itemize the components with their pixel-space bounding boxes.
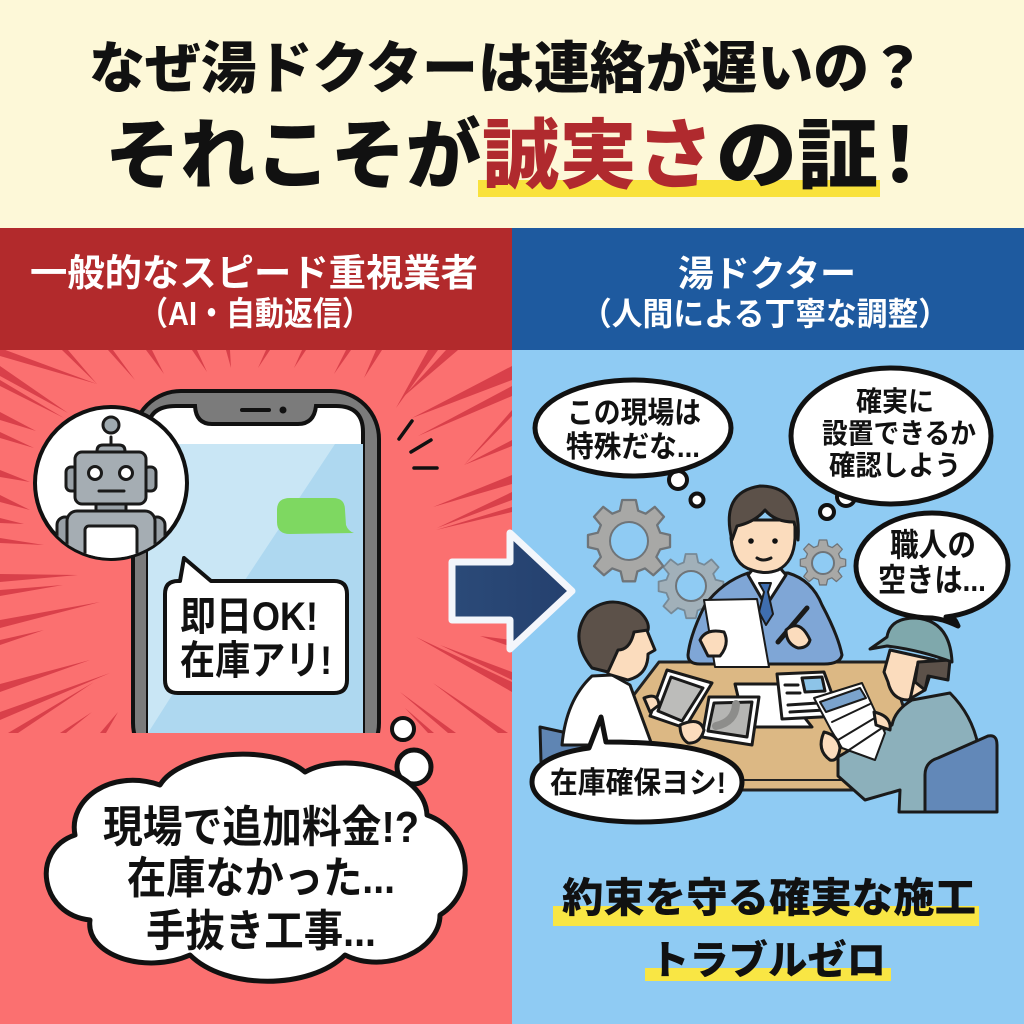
title: それこそが [105, 114, 481, 199]
panel background: blue [512, 350, 1024, 1024]
title: なぜ湯ドクターは連絡が遅いの？ [89, 37, 925, 100]
speech bubble: stock secured [532, 717, 742, 822]
speech bubble: craftsmen availability: 空きは... [878, 562, 986, 598]
header: yu doctor: 湯ドクター [678, 253, 856, 294]
speech bubble: same-day OK: 即日OK! [180, 595, 318, 639]
thought cloud: complaints [46, 718, 465, 981]
conclusion text: トラブルゼロ [650, 938, 886, 983]
header: yu doctor [512, 228, 1024, 350]
conclusion text [553, 875, 979, 983]
person: staff in white [540, 602, 704, 762]
speech bubble: same-day OK [165, 558, 347, 693]
speech bubble: this site is special: 特殊だな... [566, 431, 700, 464]
speech bubble: confirm installation [791, 368, 991, 519]
speech bubble: craftsmen availability [856, 513, 1008, 626]
panel: speed-focused operators [0, 348, 512, 1024]
cover phone below [120, 733, 390, 775]
smartphone [133, 391, 379, 771]
conclusion text: 約束を守る確実な施工 [562, 875, 976, 921]
speech bubble: confirm installation: 確実に [856, 386, 934, 417]
speech bubble: confirm installation: 設置できるか [822, 418, 976, 449]
person: manager [688, 486, 842, 667]
speech bubble: same-day OK: 在庫アリ! [180, 639, 332, 683]
title: の証 [716, 114, 878, 199]
arrow [452, 533, 572, 649]
green message bubble [277, 498, 354, 534]
header: yu doctor: （人間による丁寧な調整） [581, 296, 949, 332]
header: speed-focused operators: 一般的なスピード重視業者 [30, 252, 478, 294]
robot icon [35, 407, 187, 576]
header: speed-focused operators: （AI・自動返信） [139, 295, 371, 332]
speech bubble: craftsmen availability: 職人の [890, 527, 976, 563]
speech bubble: confirm installation: 確認しよう [829, 450, 961, 481]
panel background: red [0, 350, 512, 1024]
title [89, 37, 938, 199]
documents on table [650, 670, 840, 745]
person: worker with helmet [814, 618, 997, 812]
thought cloud: complaints: 現場で追加料金!? [103, 803, 419, 852]
table [612, 662, 930, 790]
title: ！ [862, 114, 938, 199]
speech bubble: this site is special: この現場は [567, 397, 701, 430]
speech bubble: stock secured: 在庫確保ヨシ! [550, 767, 726, 800]
burst lines [0, 348, 512, 733]
bottom strip [0, 733, 512, 1024]
gears [588, 500, 846, 618]
thought cloud: complaints: 在庫なかった... [127, 854, 395, 903]
panel: yu doctor [512, 350, 1024, 1024]
title: 誠実さ [482, 114, 714, 199]
speech bubble: this site is special [535, 380, 731, 506]
header: speed-focused operators [0, 228, 512, 350]
thought cloud: complaints: 手抜き工事... [146, 907, 376, 956]
impact lines [399, 421, 437, 468]
